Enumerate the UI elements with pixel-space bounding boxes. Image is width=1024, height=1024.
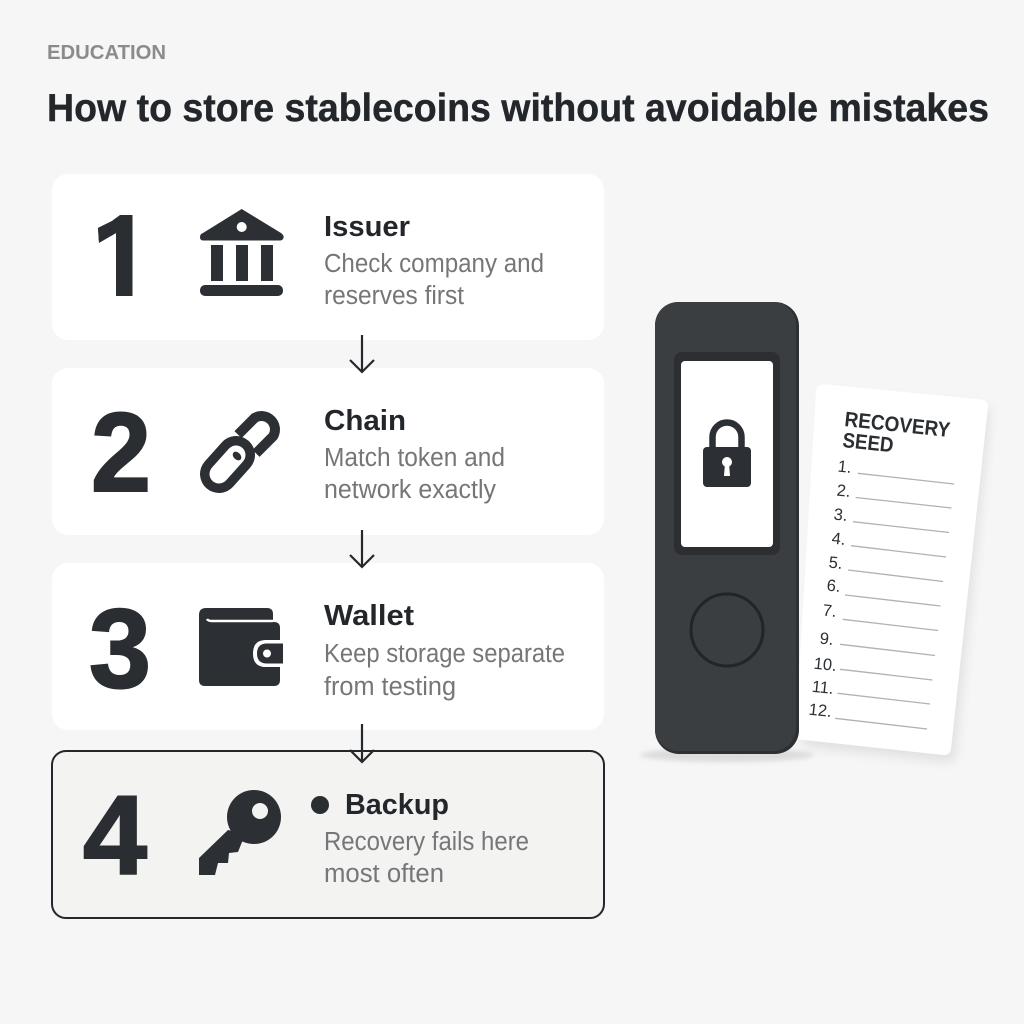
- panel: step 2 chain: [52, 368, 604, 535]
- description: wallet: from testing: [324, 673, 456, 701]
- description: backup: Recovery fails here: [324, 828, 529, 856]
- seed word numbers: 3.: [833, 506, 848, 525]
- seed heading: SEED: [841, 429, 895, 457]
- icon: chain link: [219, 416, 275, 474]
- arrow: step 1 to 2: [350, 335, 374, 372]
- icon: wallet: [199, 608, 285, 686]
- device ground shadow: [640, 748, 814, 762]
- seed word numbers: 5.: [828, 554, 843, 573]
- panel: step 3 wallet: [52, 563, 604, 730]
- heading: backup: Backup: [345, 789, 449, 821]
- description: issuer: Check company and: [324, 250, 544, 278]
- description: chain: network exactly: [324, 476, 496, 504]
- seed word numbers: 10.: [813, 655, 837, 675]
- seed word numbers: 1.: [837, 458, 852, 477]
- arrow: step 3 to 4: [350, 724, 374, 762]
- heading: wallet: Wallet: [324, 600, 414, 632]
- status dot: [311, 796, 329, 814]
- seed word numbers: 9.: [819, 630, 834, 649]
- number 1: [98, 215, 132, 296]
- seed word numbers: 4.: [831, 530, 846, 549]
- description: wallet: Keep storage separate: [324, 640, 565, 668]
- number 1: 1: [85, 195, 147, 320]
- panel: step 1 issuer: [52, 174, 604, 340]
- round button: [691, 594, 763, 666]
- recovery seed card: [795, 384, 990, 762]
- icon: bank building: [200, 209, 284, 296]
- number 4: 4: [83, 773, 147, 898]
- description: backup: most often: [324, 860, 444, 888]
- arrow: step 2 to 3: [350, 530, 374, 567]
- number 2: 2: [91, 390, 151, 515]
- seed word numbers: 2.: [836, 482, 851, 501]
- heading: issuer: Issuer: [324, 211, 410, 243]
- description: issuer: reserves first: [324, 282, 464, 310]
- panel: step 4 backup highlighted: [52, 751, 604, 918]
- seed word numbers: 6.: [826, 577, 841, 596]
- heading: chain: Chain: [324, 405, 406, 437]
- eyebrow label: EDUCATION: [47, 42, 166, 64]
- device body: [655, 302, 799, 754]
- seed word numbers: 12.: [808, 701, 832, 721]
- seed word numbers: 7.: [822, 602, 837, 621]
- seed word numbers: 11.: [811, 678, 834, 698]
- icon: key: [199, 790, 281, 875]
- seed heading: [841, 408, 951, 457]
- description: chain: Match token and: [324, 444, 505, 472]
- seed word numbers: [808, 458, 852, 721]
- icon: padlock: [703, 422, 751, 487]
- hardware wallet device: [640, 302, 814, 762]
- title: How to store stablecoins without avoidable mistakes: [47, 87, 989, 130]
- number 3: 3: [89, 586, 151, 711]
- seed heading: RECOVERY: [843, 408, 951, 442]
- seed word write-in lines: [835, 473, 954, 729]
- screen: [674, 352, 780, 555]
